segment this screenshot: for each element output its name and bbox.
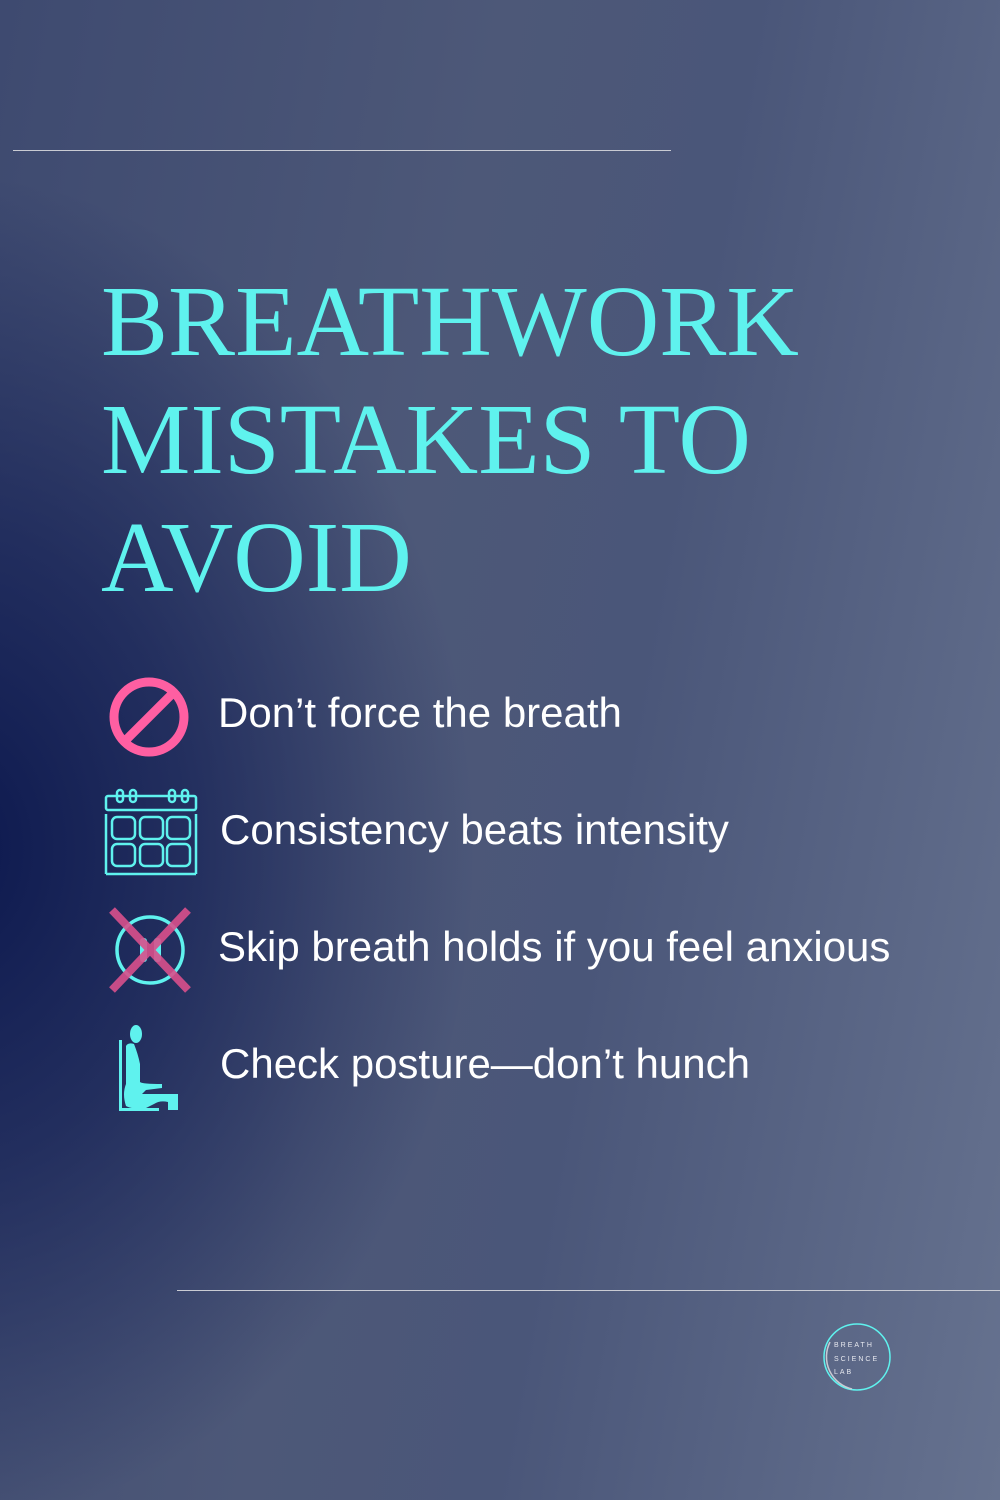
icon: seated posture	[119, 1025, 178, 1111]
icon: prohibition	[110, 678, 188, 756]
logo: breath science lab: SCIENCE	[834, 1356, 879, 1362]
title: BREATHWORK	[101, 265, 799, 377]
icon: calendar	[104, 788, 198, 876]
title: AVOID	[101, 501, 412, 613]
title	[101, 265, 799, 613]
icon: cancelled pause	[109, 907, 191, 993]
item 4 text: Check posture—don’t hunch	[220, 1040, 750, 1087]
title: MISTAKES TO	[101, 383, 751, 495]
logo: breath science lab: LAB	[834, 1369, 853, 1376]
logo: breath science lab	[823, 1323, 891, 1391]
item 3 text: Skip breath holds if you feel anxious	[218, 923, 890, 970]
item 2 text: Consistency beats intensity	[220, 806, 729, 853]
item 1 text: Don’t force the breath	[218, 689, 622, 736]
logo: breath science lab: BREATH	[834, 1342, 874, 1349]
